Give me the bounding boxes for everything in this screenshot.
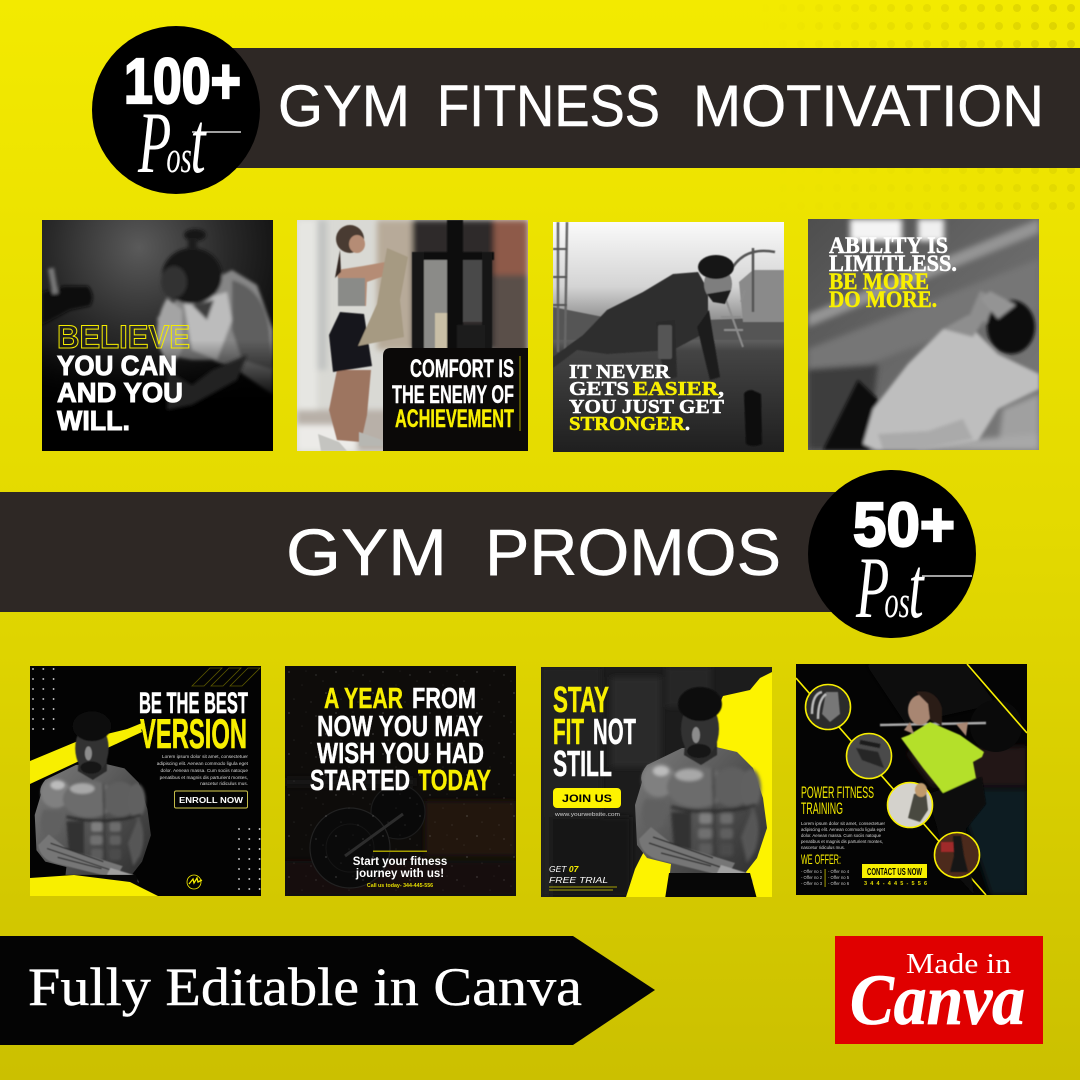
body copy: adipiscing elit. Aenean commodo ligula eget bbox=[157, 761, 249, 766]
muscular man bbox=[35, 711, 151, 898]
text: ability is limitless be more do more: LIMITLESS. bbox=[829, 251, 957, 276]
text: stay fit not still: FIT bbox=[553, 711, 584, 752]
text: it never gets easier you just get stronger bbox=[569, 361, 725, 435]
text: you can and you will: YOU CAN bbox=[57, 350, 177, 381]
body copy: nascetur ridiculus mus. bbox=[801, 845, 845, 850]
body copy: penatibus et magnis dis parturient montes, bbox=[160, 775, 248, 780]
body copy: Lorem ipsum dolor sit amet, consectetuer bbox=[162, 754, 248, 759]
text: stay fit not still: STILL bbox=[553, 743, 612, 784]
text: you can and you will: WILL. bbox=[57, 405, 130, 436]
offer list: - Offer no 4 bbox=[828, 869, 850, 874]
text: believe: BELIEVE bbox=[57, 319, 190, 355]
heading: gym fitness motivation: FITNESS bbox=[437, 74, 660, 139]
body copy bbox=[157, 754, 249, 786]
badge: 100+ post bbox=[92, 26, 260, 194]
yellow diagonal lines bbox=[796, 664, 1027, 895]
offer list: - Offer no 2 bbox=[801, 875, 823, 880]
offer list: - Offer no 1 bbox=[801, 869, 823, 874]
badge: 100+ post: 100+ bbox=[124, 45, 241, 117]
text: start your fitness journey: journey with us! bbox=[355, 868, 444, 880]
body copy bbox=[801, 821, 886, 850]
heading: gym promos: PROMOS bbox=[485, 515, 781, 589]
made in canva badge: Canva bbox=[850, 960, 1025, 1040]
body copy: Lorem ipsum dolor sit amet, consectetuer bbox=[801, 821, 886, 826]
heading: gym fitness motivation: MOTIVATION bbox=[693, 74, 1044, 139]
heading: gym fitness motivation bbox=[278, 74, 1044, 139]
text: it never gets easier you just get stronger: STRONGER. bbox=[569, 413, 690, 435]
text: start your fitness journey bbox=[353, 856, 447, 880]
text: power fitness training: TRAINING bbox=[801, 799, 843, 818]
heading: gym promos: GYM bbox=[286, 515, 447, 589]
website: www.yourwebsite.com bbox=[554, 812, 620, 818]
card: stay fit not still bbox=[541, 667, 772, 897]
button: join us bbox=[553, 788, 621, 808]
text: get 07 free trial: FREE TRIAL bbox=[549, 875, 608, 885]
text: it never gets easier you just get stronger: IT NEVER bbox=[569, 361, 671, 383]
text: stay fit not still: STAY bbox=[553, 679, 609, 720]
text: you can and you will: AND YOU bbox=[57, 377, 183, 408]
button: enroll now bbox=[174, 791, 248, 808]
headline: a year from now: A YEAR bbox=[324, 683, 403, 715]
woman figure bbox=[318, 225, 408, 451]
text: comfort is the enemy of achievement bbox=[392, 355, 514, 433]
promo band bbox=[0, 492, 870, 612]
text: it never gets easier you just get stronger: EASIER , bbox=[633, 378, 724, 400]
badge: 50+ post bbox=[808, 470, 976, 638]
text: ability is limitless be more do more: DO MORE. bbox=[829, 287, 937, 312]
header band: gym fitness motivation bbox=[230, 48, 1080, 168]
text: get 07 free trial bbox=[549, 864, 617, 890]
offer list bbox=[801, 869, 850, 887]
text: we offer: WE OFFER: bbox=[801, 851, 841, 867]
text: power fitness training: POWER FITNESS bbox=[801, 783, 874, 802]
text: ability is limitless be more do more bbox=[829, 233, 957, 312]
text: it never gets easier you just get stronger: GETS bbox=[569, 378, 629, 400]
badge: 100+ post: Post bbox=[137, 94, 207, 191]
headline: a year from now: FROM bbox=[412, 683, 476, 715]
made in canva badge: Made in bbox=[906, 948, 1012, 980]
card: a year from now: Call us today- 344-445-556 bbox=[367, 883, 433, 889]
muscular man bbox=[635, 687, 767, 899]
text panel bbox=[383, 348, 528, 451]
text: ability is limitless be more do more: ABILITY IS bbox=[829, 233, 948, 258]
decorative parallelograms bbox=[192, 668, 260, 686]
made in canva badge bbox=[835, 936, 1043, 1044]
torn yellow panel bbox=[626, 672, 772, 897]
button: contact us now: CONTACT US NOW bbox=[867, 866, 922, 878]
card: believe you can and you will bbox=[42, 220, 273, 451]
button: contact us now bbox=[862, 864, 927, 878]
text: power fitness training bbox=[801, 783, 874, 818]
text: ability is limitless be more do more: BE MORE bbox=[829, 269, 929, 294]
body copy: penatibus et magnis dis parturient montes, bbox=[801, 839, 883, 844]
text: stay fit not still bbox=[553, 679, 636, 784]
lower brush stroke bbox=[30, 875, 158, 896]
footer arrow banner bbox=[0, 936, 655, 1045]
body copy: dolor. Aenean massa. Cum sociis natoque bbox=[801, 833, 882, 838]
phone number: 3 4 4 - 4 4 5 - 5 5 6 bbox=[864, 881, 927, 887]
circular photos bbox=[806, 684, 980, 878]
headline: a year from now bbox=[310, 683, 491, 797]
offer list: - Offer no 5 bbox=[828, 875, 850, 880]
heading: gym promos bbox=[286, 515, 781, 589]
body copy: dolor. Aenean massa. Cum sociis natoque bbox=[160, 768, 248, 773]
barbell plates bbox=[310, 785, 425, 888]
heading: gym fitness motivation: GYM bbox=[278, 74, 410, 139]
logo mark bbox=[187, 875, 202, 889]
card: it never gets easier bbox=[553, 222, 784, 452]
text: you can and you will bbox=[57, 350, 183, 436]
yellow brush stroke bbox=[30, 723, 144, 784]
card: comfort is the enemy of achievement bbox=[297, 220, 528, 451]
body copy: nascetur ridiculus mus. bbox=[200, 781, 248, 786]
card: power fitness training bbox=[796, 664, 1027, 895]
badge: 50+ post: 50+ bbox=[853, 491, 955, 560]
card: ability is limitless bbox=[808, 219, 1039, 450]
headline: a year from now: STARTED bbox=[310, 765, 410, 797]
card: be the best version bbox=[30, 666, 261, 896]
text: it never gets easier you just get stronger: YOU JUST GET bbox=[569, 396, 725, 418]
offer list: - Offer no 3 bbox=[801, 881, 823, 886]
button: enroll now: ENROLL NOW bbox=[179, 795, 244, 805]
card: a year from now bbox=[285, 666, 516, 896]
body copy: adipiscing elit. Aenean commodo ligula eget bbox=[801, 827, 886, 832]
woman with barbell bbox=[880, 691, 986, 895]
text: stay fit not still: NOT bbox=[593, 711, 636, 752]
woman figure bbox=[823, 291, 1039, 450]
text: get 07 free trial: GET 07 bbox=[549, 864, 580, 874]
headline: a year from now: TODAY bbox=[418, 765, 491, 797]
offer list: - Offer no 6 bbox=[828, 881, 850, 886]
badge: 50+ post: Post bbox=[855, 539, 925, 636]
button: join us: JOIN US bbox=[562, 793, 612, 805]
text: fully editable in canva: Fully Editable in Canva bbox=[28, 957, 582, 1017]
text: start your fitness journey: Start your fitness bbox=[353, 856, 447, 868]
